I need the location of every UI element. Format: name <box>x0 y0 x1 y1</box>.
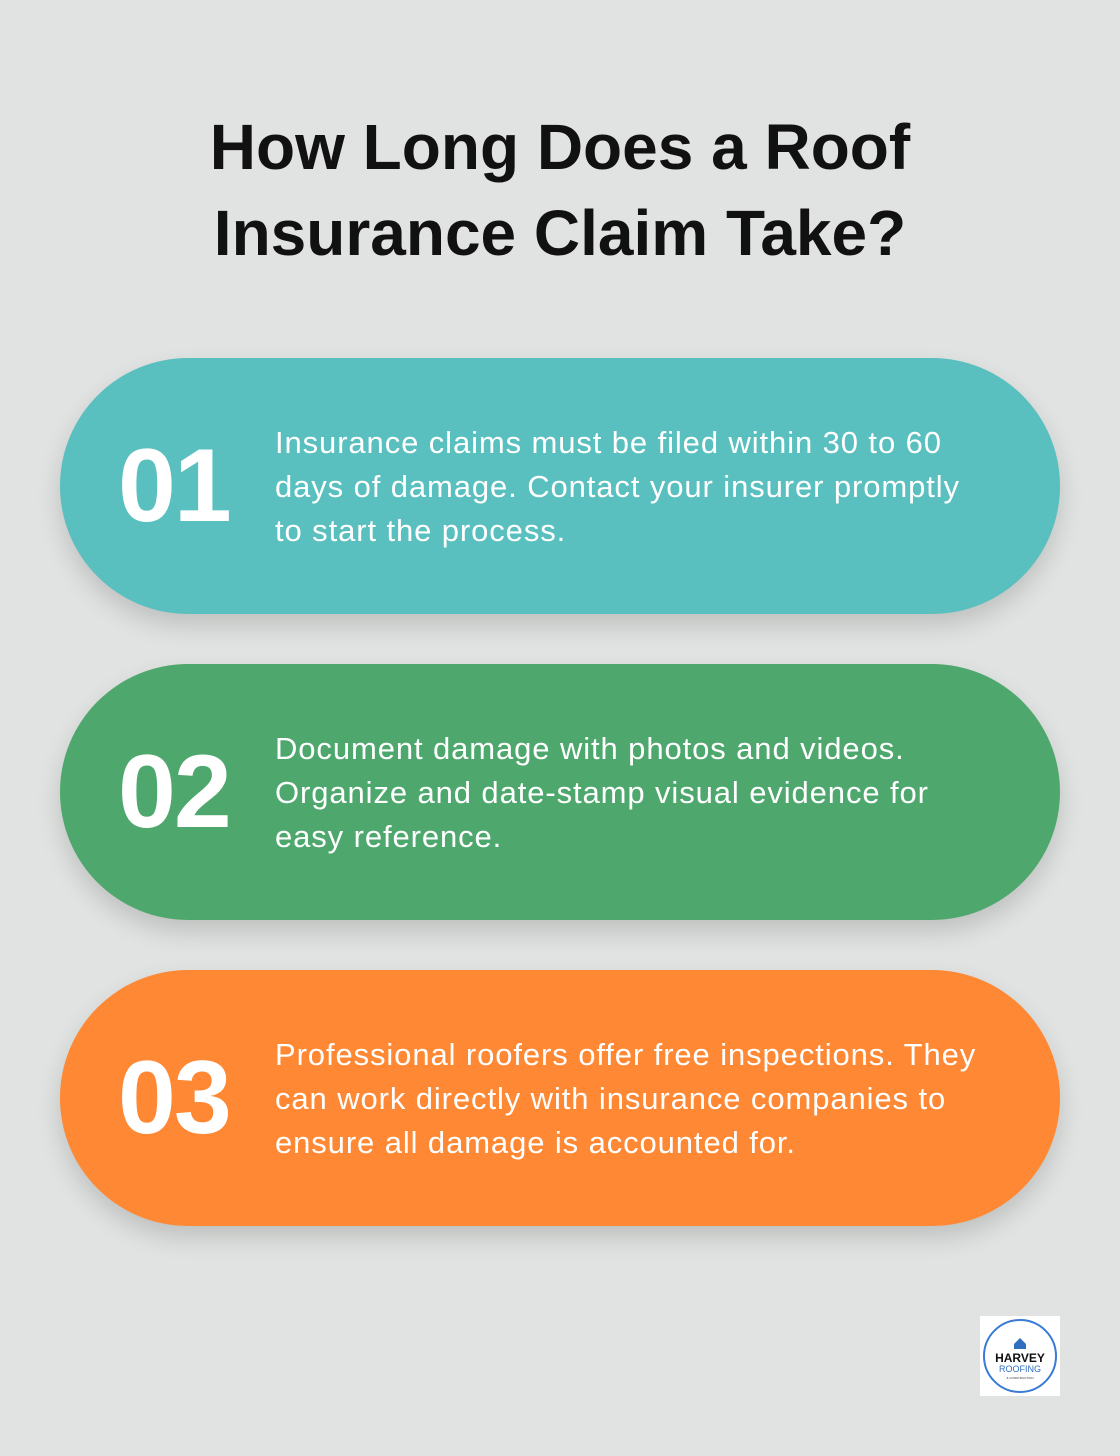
text 02: Document damage with photos and videos. <box>275 731 905 766</box>
text 02: easy reference. <box>275 819 502 854</box>
number 02: 02 <box>118 734 230 850</box>
text 02: Organize and date-stamp visual evidence for <box>275 775 929 810</box>
text 03: Professional roofers offer free inspections. They <box>275 1037 976 1072</box>
logo: ROOFING <box>999 1364 1041 1374</box>
text 03: can work directly with insurance companies to <box>275 1081 946 1116</box>
text 01: days of damage. Contact your insurer promptly <box>275 469 960 504</box>
title: Insurance Claim Take? <box>214 197 906 269</box>
number 01: 01 <box>118 428 230 544</box>
panel: step 01 <box>60 358 1060 614</box>
text 03 <box>275 1037 976 1160</box>
logo: & CONSTRUCTION <box>1006 1376 1034 1380</box>
logo: HARVEY <box>995 1351 1045 1365</box>
text 01 <box>275 425 960 548</box>
text 03: ensure all damage is accounted for. <box>275 1125 796 1160</box>
panel: step 02 <box>60 664 1060 920</box>
text 02 <box>275 731 929 854</box>
number 03: 03 <box>118 1040 230 1156</box>
text 01: to start the process. <box>275 513 566 548</box>
title: How Long Does a Roof <box>210 111 910 183</box>
panel: step 03 <box>60 970 1060 1226</box>
text 01: Insurance claims must be filed within 30 to 60 <box>275 425 942 460</box>
logo <box>980 1316 1060 1396</box>
title <box>210 111 910 269</box>
